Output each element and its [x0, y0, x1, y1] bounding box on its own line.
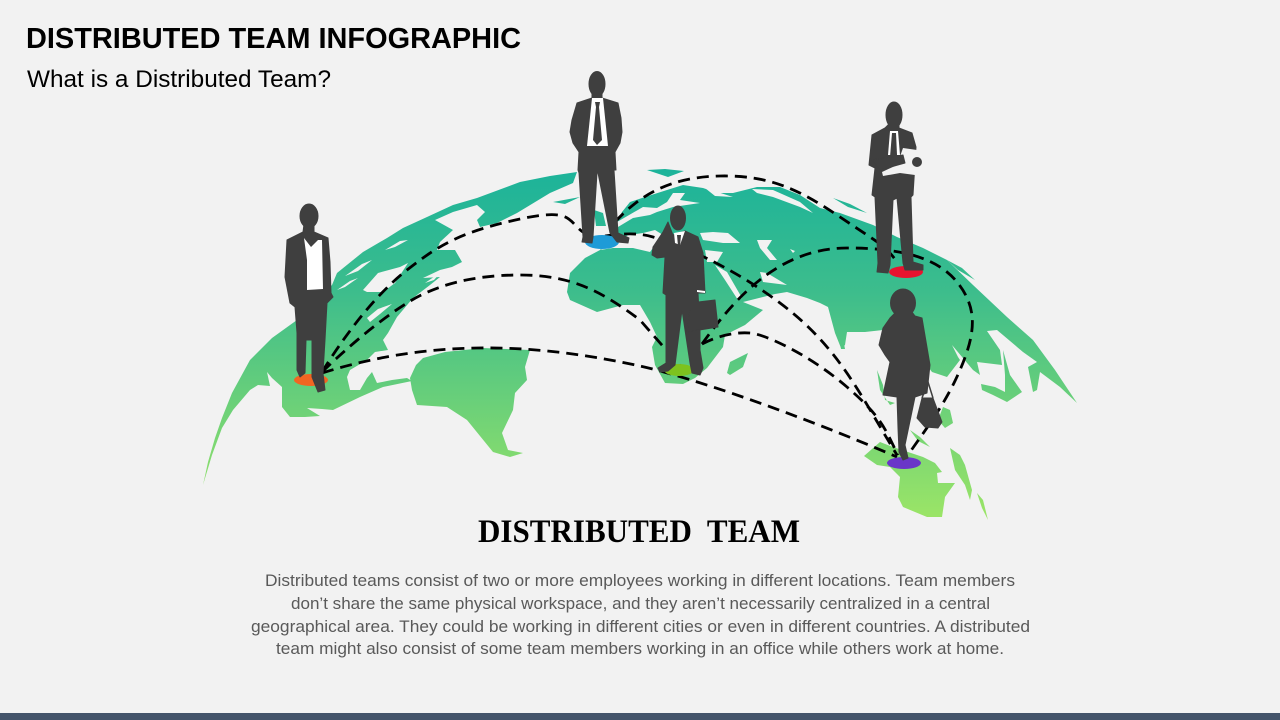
islands: [553, 169, 1022, 520]
arctic slivers: [647, 169, 684, 177]
southeast asia islands: [950, 448, 972, 500]
inland water: [337, 188, 813, 322]
link: green to purple: [702, 333, 898, 455]
link: orange to blue: [322, 215, 590, 372]
description text: geographical area. They could be working in different cities or even in different countries. A distributed: [251, 617, 1030, 636]
paper: [882, 148, 921, 176]
location marker: orange: [294, 374, 328, 386]
eurasia and africa: [567, 185, 1077, 403]
madagascar: [727, 353, 748, 375]
person: man holding paper: [869, 102, 923, 273]
world map: [203, 169, 1077, 520]
link: blue to red: [615, 176, 897, 262]
link: orange to purple: [322, 348, 897, 457]
person: woman with handbag: [879, 289, 942, 460]
australia: [864, 442, 955, 517]
description text: team might also consist of some team members working in an office while others work at home.: [276, 639, 1004, 658]
south america: [410, 348, 530, 457]
sri lanka: [840, 342, 845, 349]
description text: [251, 571, 1030, 658]
subtitle: What is a Distributed Team?: [27, 66, 331, 93]
person: man on phone with briefcase: [652, 206, 718, 375]
dashed connections: [322, 176, 972, 457]
location marker: purple: [887, 457, 921, 469]
location marker: green: [664, 364, 694, 376]
title: DISTRIBUTED TEAM INFOGRAPHIC: [26, 23, 521, 55]
person: man with hands in pockets: [570, 72, 629, 243]
north america and greenland: [203, 172, 577, 485]
footer bar: [0, 713, 1280, 720]
briefcase: [687, 300, 718, 332]
british isles: [594, 210, 606, 226]
description text: don’t share the same physical workspace, and they aren’t necessarily centralized in a central: [291, 594, 990, 613]
location marker: blue: [585, 235, 619, 249]
description text: Distributed teams consist of two or more employees working in different locations. Team members: [265, 571, 1015, 590]
handbag: [917, 398, 942, 428]
link: orange to green: [322, 275, 682, 372]
link: green to purple via red: [702, 248, 972, 455]
person: woman in suit: [285, 204, 333, 392]
section heading: DISTRIBUTED TEAM: [478, 514, 800, 550]
link: blue to purple: [605, 234, 897, 455]
location marker: red: [889, 266, 923, 278]
